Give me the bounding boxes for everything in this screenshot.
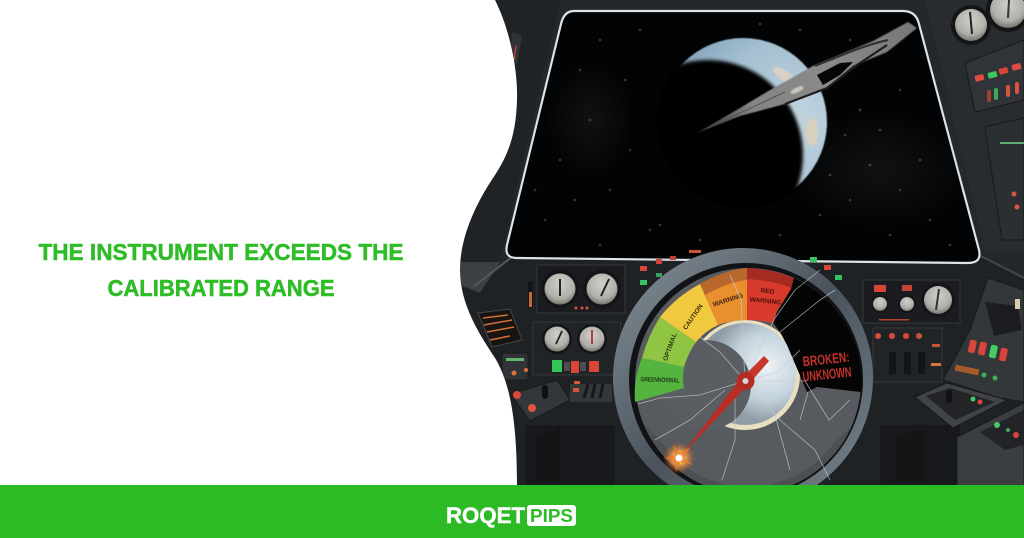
logo: RoqetPips: PIPS (530, 506, 573, 526)
panel: white curved text area (0, 0, 517, 486)
footer bar (0, 485, 1024, 538)
planet rings (697, 22, 917, 133)
planet with crescent light (680, 37, 828, 188)
starfield (534, 23, 951, 246)
label: broken unknown (802, 349, 852, 385)
panel: spaceship cockpit scene (450, 0, 1024, 508)
right controls cluster (863, 278, 1024, 486)
window: viewport onto space (506, 11, 980, 263)
left gauges cluster (478, 265, 625, 421)
label: caution: CAUTION (682, 303, 705, 331)
top-of-console indicator lights (640, 250, 842, 285)
spark at needle tip (663, 442, 695, 474)
label: optimal: OPTIMAL (662, 332, 679, 362)
title (38, 239, 404, 301)
dial reflected planet disc (661, 320, 800, 430)
gauge: broken instrument dial (613, 248, 873, 508)
segment: warning (700, 268, 747, 325)
segment: optimal (642, 317, 696, 367)
logo: RoqetPips: ROQET (446, 503, 526, 528)
label: broken unknown: UNKNOWN (802, 363, 852, 385)
glass cracks (638, 270, 850, 480)
title: CALIBRATED RANGE (108, 275, 334, 301)
broken black section (773, 278, 861, 392)
segment: caution (660, 284, 718, 342)
label: green normal: GREENNORMAL (640, 376, 680, 385)
label: warning: WARNING (712, 292, 744, 309)
title: THE INSTRUMENT EXCEEDS THE (38, 239, 404, 265)
logo: RoqetPips (446, 503, 576, 528)
label: red warning: WARNING (749, 296, 781, 307)
label: broken unknown: BROKEN: (802, 349, 850, 369)
segment: red warning (747, 268, 794, 323)
segment: green normal (635, 358, 684, 402)
label: red warning: RED (760, 287, 775, 296)
needle (680, 356, 769, 457)
upper right controls (511, 0, 1024, 240)
